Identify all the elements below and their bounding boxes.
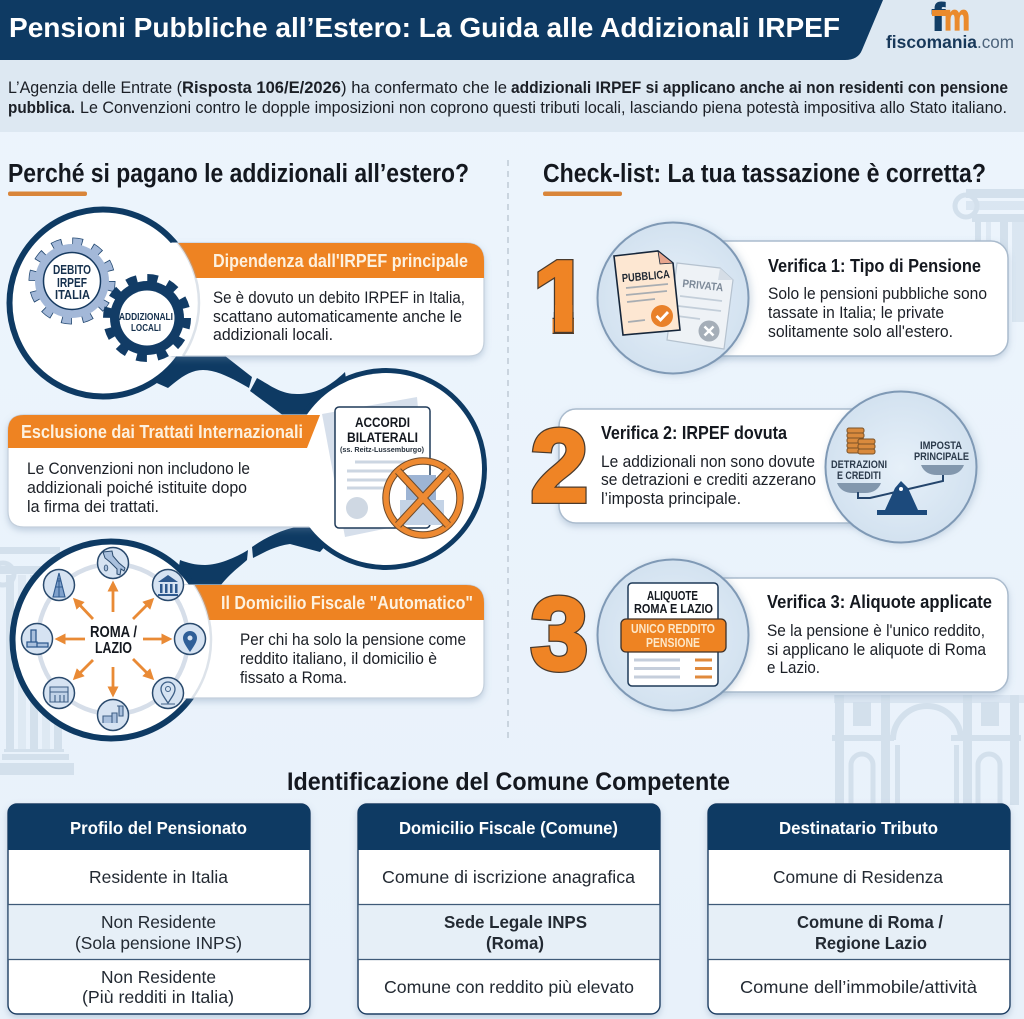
card 1 <box>172 243 484 356</box>
panel: Verifica 1 <box>534 222 1008 374</box>
number 1: 1 <box>534 241 589 353</box>
connector: circle 1 to circle 2 <box>150 352 350 416</box>
gear: addizionali locali <box>108 278 186 358</box>
heading: right column: Check-list: La tua tassazione è corretta? <box>543 160 986 188</box>
card: Verifica 1 <box>680 241 1008 356</box>
icon: palazzo <box>44 678 74 708</box>
intro text: Risposta 106/E/2026 <box>182 78 341 97</box>
table column: Profilo del Pensionato: Non Residente <box>101 967 216 987</box>
table column: Domicilio Fiscale <box>358 804 660 1014</box>
arrows <box>59 585 168 693</box>
gear: debito IRPEF: ITALIA <box>55 288 90 302</box>
card 2 <box>8 415 340 527</box>
logo <box>886 0 1014 52</box>
table column: Profilo del Pensionato <box>8 804 310 1014</box>
icon: aqueduct <box>98 700 128 730</box>
icon: prohibited sign <box>386 461 460 535</box>
gear: debito IRPEF: DEBITO <box>53 263 91 277</box>
table column: Domicilio Fiscale: Comune con reddito più elevato <box>384 977 634 997</box>
background: column left <box>0 547 74 775</box>
card 2 heading: Esclusione dai Trattati Internazionali <box>21 421 303 442</box>
table column: Profilo del Pensionato: (Più redditi in Italia) <box>82 987 234 1007</box>
intro text: ) ha confermato che le <box>341 78 507 97</box>
scale labels: DETRAZIONI <box>831 459 887 471</box>
icon: tax rate document: UNICO REDDITO <box>631 622 715 636</box>
card 2 text <box>27 459 250 516</box>
number 3: 3 <box>531 577 588 691</box>
icon: tax rate document: ROMA E LAZIO <box>634 602 713 616</box>
card 2 header bar <box>8 415 320 448</box>
number 1: 1 <box>534 241 589 353</box>
icon: Rome radial diagram <box>22 548 206 730</box>
icon: accordi bilaterali document: ACCORDI <box>355 415 410 430</box>
icon: accordi bilaterali document: BILATERALI <box>347 430 418 445</box>
table column: Profilo del Pensionato: Non Residente <box>101 912 216 932</box>
number 1 <box>537 259 574 334</box>
heading: left column: Perché si pagano le addizionali all’estero? <box>8 160 469 188</box>
icon: balance scale <box>826 392 976 542</box>
icon: location pin solid <box>174 624 206 654</box>
heading: Verifica 1: Tipo di Pensione <box>768 255 981 276</box>
table column: Destinatario Tributo <box>708 804 1010 1014</box>
background: column top right <box>955 189 1024 322</box>
title: Pensioni Pubbliche all’Estero: La Guida alle Addizionali IRPEF <box>9 12 840 43</box>
table column: Destinatario Tributo: Comune di Roma / <box>797 912 943 932</box>
document: privata: PRIVATA <box>682 278 724 294</box>
card: Verifica 2 <box>559 409 889 523</box>
icon: Italy <box>98 548 128 578</box>
body text: l’imposta principale. <box>601 489 741 508</box>
table column: Profilo del Pensionato: (Sola pensione INPS) <box>75 933 242 953</box>
intro text <box>8 78 1008 117</box>
background: arch bottom right <box>832 695 1024 805</box>
table column: Destinatario Tributo: Regione Lazio <box>815 933 927 953</box>
body text: Solo le pensioni pubbliche sono <box>768 284 987 303</box>
icon: gears <box>33 242 186 358</box>
body text <box>767 621 986 677</box>
panel: Esclusione dai Trattati Internazionali <box>8 371 484 567</box>
icon: accordi bilaterali document <box>322 397 460 537</box>
number 3: 3 <box>531 577 588 691</box>
card 1 text: Se è dovuto un debito IRPEF in Italia, <box>213 288 465 307</box>
table column: Domicilio Fiscale: (Roma) <box>486 933 544 953</box>
card 3 text: Per chi ha solo la pensione come <box>240 630 466 649</box>
table column: Destinatario Tributo: Destinatario Tributo <box>779 818 938 838</box>
body text <box>768 284 987 341</box>
panel: Dipendenza dall'IRPEF principale <box>7 207 484 399</box>
icon: temple <box>152 570 184 600</box>
icon: tax rate document: ALIQUOTE <box>647 589 698 603</box>
body text: e Lazio. <box>767 658 820 677</box>
panel: Verifica 3 <box>531 560 1008 710</box>
header banner <box>0 0 1024 132</box>
icon: pension documents <box>598 222 748 374</box>
body text <box>601 452 816 508</box>
intro text: L’Agenzia delle Entrate ( <box>8 78 182 97</box>
body text: se detrazioni e crediti azzerano <box>601 470 816 489</box>
heading: Verifica 3: Aliquote applicate <box>767 591 992 612</box>
card 1 text <box>213 288 465 344</box>
gear: addizionali locali: ADDIZIONALI <box>119 311 173 323</box>
table column: Domicilio Fiscale: Sede Legale INPS <box>444 912 587 932</box>
card 2 text: la firma dei trattati. <box>27 497 159 516</box>
scale labels: IMPOSTA <box>920 440 962 452</box>
card 1 text: addizionali locali. <box>213 325 333 344</box>
connector: circle 2 to circle 3 <box>175 526 335 590</box>
gear: debito IRPEF: IRPEF <box>57 276 87 290</box>
scale labels: PRINCIPALE <box>914 451 969 463</box>
icon: colosseum <box>22 624 52 654</box>
body text: Le addizionali non sono dovute <box>601 452 815 471</box>
card 3 <box>185 585 484 698</box>
icon: tax rate document <box>598 560 748 710</box>
card 1 heading: Dipendenza dall'IRPEF principale <box>213 250 468 271</box>
center label: LAZIO <box>95 640 132 657</box>
card: Verifica 3 <box>680 578 1008 692</box>
logo: .com <box>977 32 1014 52</box>
body text: tassate in Italia; le private <box>768 303 944 322</box>
card 3 text <box>240 630 466 687</box>
number 2: 2 <box>531 409 588 523</box>
table column: Destinatario Tributo: Comune di Residenza <box>773 867 943 887</box>
center label: ROMA / <box>90 624 138 641</box>
document: pubblica: PUBBLICA <box>621 269 670 285</box>
scale <box>837 465 964 515</box>
document: privata <box>667 263 733 349</box>
table column: Domicilio Fiscale: Domicilio Fiscale (Comune) <box>399 818 618 838</box>
heading: Verifica 2: IRPEF dovuta <box>601 422 788 443</box>
center label <box>90 624 138 657</box>
document: pubblica <box>614 251 680 335</box>
heading: Identificazione del Comune Competente: Identificazione del Comune Competente <box>287 768 730 796</box>
number 2: 2 <box>531 409 588 523</box>
panel: Il Domicilio Fiscale Automatico <box>11 540 484 740</box>
body text: si applicano le aliquote di Roma <box>767 640 986 659</box>
body text: Se la pensione è l'unico reddito, <box>767 621 985 640</box>
scale labels <box>831 440 969 482</box>
card 3 text: fissato a Roma. <box>240 668 347 687</box>
icon: location pin outline <box>152 678 184 708</box>
table column: Domicilio Fiscale: Comune di iscrizione anagrafica <box>382 867 635 887</box>
card 1 text: scattano automaticamente anche le <box>213 307 462 326</box>
coins <box>847 428 875 454</box>
card 3 text: reddito italiano, il domicilio è <box>240 649 437 668</box>
card 2 text: addizionali poiché istituite dopo <box>27 478 247 497</box>
logo: fiscomania <box>886 32 977 52</box>
table column: Destinatario Tributo: Comune dell’immobile/attività <box>740 977 977 997</box>
scale labels: E CREDITI <box>837 470 881 482</box>
table column: Profilo del Pensionato: Residente in Italia <box>89 867 228 887</box>
icon: tower <box>44 570 74 600</box>
card 2 text: Le Convenzioni non includono le <box>27 459 250 478</box>
body text: solitamente solo all'estero. <box>768 322 953 341</box>
gear: debito IRPEF <box>33 242 111 320</box>
table column: Profilo del Pensionato: Profilo del Pensionato <box>70 818 247 838</box>
panel: Verifica 2 <box>531 392 976 542</box>
card 3 heading: Il Domicilio Fiscale "Automatico" <box>221 592 473 613</box>
icon: tax rate document: PENSIONE <box>646 636 700 650</box>
intro text: pubblica. <box>8 98 75 117</box>
icon: accordi bilaterali document: (ss. Reitz-Lussemburgo) <box>340 445 424 454</box>
gear: addizionali locali: LOCALI <box>131 322 161 334</box>
